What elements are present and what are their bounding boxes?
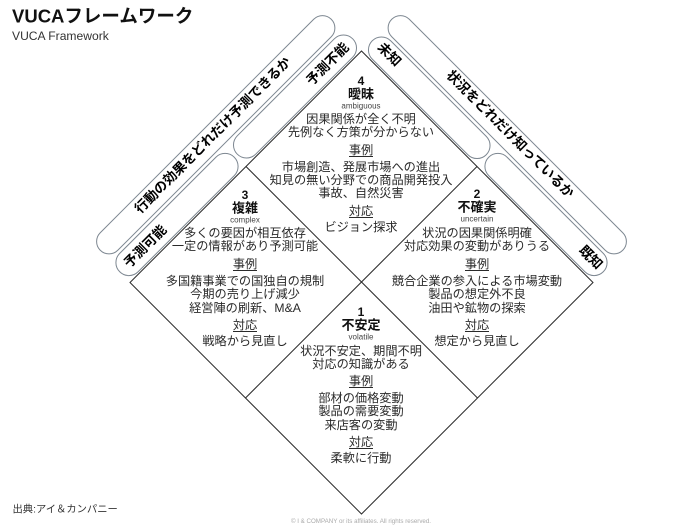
panel: 1 volatile: volatile [349, 332, 374, 342]
panel: 4 ambiguous: 知見の無い分野での商品開発投入 [270, 172, 452, 187]
panel: 1 volatile: 製品の需要変動 [318, 403, 404, 418]
panel: 4 ambiguous: 曖昧 [348, 86, 374, 102]
band: known [480, 148, 612, 281]
panel: 3 complex: 複雑 [232, 200, 258, 216]
panel: 3 complex: 3 [242, 188, 249, 202]
panel: 4 ambiguous: 先例なく方策が分からない [288, 124, 434, 139]
panel: 1 volatile: 不安定 [341, 318, 381, 332]
panel: 1 volatile [300, 305, 422, 465]
panel: 3 complex: 戦略から見直し [202, 333, 288, 348]
subtitle: VUCA Framework [12, 29, 110, 43]
panel: 4 ambiguous: 対応 [349, 204, 373, 218]
panel: 2 uncertain [392, 187, 562, 348]
panel: 3 complex: 一定の情報があり予測可能 [172, 238, 318, 253]
band: knowledge axis: 状況をどれだけ知っているか [443, 67, 578, 201]
panel: 2 uncertain: 油田や鉱物の探索 [428, 301, 526, 315]
panel: 1 volatile: 来店客の変動 [324, 417, 398, 432]
title: VUCAフレームワーク [12, 6, 193, 26]
band: unpredictable [228, 30, 362, 163]
panel: 1 volatile: 対応の知識がある [312, 356, 410, 371]
panel: 2 uncertain: 製品の想定外不良 [428, 286, 526, 301]
panel: 1 volatile: 状況不安定、期間不明 [300, 343, 422, 358]
panel: 4 ambiguous: 事例 [349, 143, 373, 157]
panel: 1 volatile: 事例 [349, 374, 373, 388]
panel: 2 uncertain: 事例 [465, 257, 489, 271]
panel: 3 complex: 今期の売り上げ減少 [190, 286, 300, 301]
panel: 4 ambiguous [270, 74, 452, 234]
band: unknown [363, 32, 495, 164]
band: known: 既知 [576, 243, 606, 272]
panel: 4 ambiguous: 因果関係が全く不明 [306, 111, 416, 126]
panel: 4 ambiguous: ambiguous [341, 102, 381, 110]
panel: 3 complex: 多国籍事業での国独自の規制 [166, 273, 324, 288]
panel: 2 uncertain: uncertain [461, 214, 493, 224]
panel: 1 volatile: 柔軟に行動 [331, 450, 391, 465]
panel: 2 uncertain: 2 [474, 187, 481, 201]
panel: 3 complex: 経営陣の刷新、M&A [189, 301, 302, 315]
diamond matrix [130, 51, 593, 514]
panel: 2 uncertain: 対応効果の変動がありうる [404, 238, 550, 253]
panel: 2 uncertain: 想定から見直し [434, 333, 520, 348]
panel: 3 complex: 多くの要因が相互依存 [184, 225, 306, 240]
panel: 3 complex: 事例 [233, 257, 257, 271]
band: predictability axis: 行動の効果をどれだけ予測できるか [131, 53, 294, 216]
panel: 2 uncertain: 競合企業の参入による市場変動 [392, 273, 562, 288]
band: knowledge axis [383, 10, 632, 259]
band: predictable: 予測可能 [120, 221, 170, 271]
band: unpredictable: 予測不能 [303, 39, 352, 88]
panel: 3 complex: complex [230, 216, 260, 224]
panel: 3 complex: 対応 [233, 318, 257, 332]
source note: 出典:アイ＆カンパニー [12, 502, 118, 516]
panel: 3 complex [166, 188, 324, 348]
panel: 4 ambiguous: 市場創造、発展市場への進出 [282, 160, 440, 174]
panel: 1 volatile: 対応 [349, 435, 373, 449]
panel: 4 ambiguous: ビジョン探求 [324, 220, 398, 234]
panel: 2 uncertain: 状況の因果関係明確 [422, 225, 532, 240]
panel: 4 ambiguous: 事故、自然災害 [318, 185, 404, 200]
panel: 4 ambiguous: 4 [358, 74, 365, 88]
panel: 2 uncertain: 不確実 [457, 200, 497, 214]
band: predictable [111, 148, 243, 281]
band: predictability axis [91, 10, 340, 259]
panel: 1 volatile: 1 [358, 305, 365, 319]
band: unknown: 未知 [375, 40, 404, 69]
copyright: © I & COMPANY or its affiliates. All rights reserved. [291, 518, 431, 525]
panel: 1 volatile: 部材の価格変動 [318, 390, 404, 405]
panel: 2 uncertain: 対応 [465, 318, 489, 332]
